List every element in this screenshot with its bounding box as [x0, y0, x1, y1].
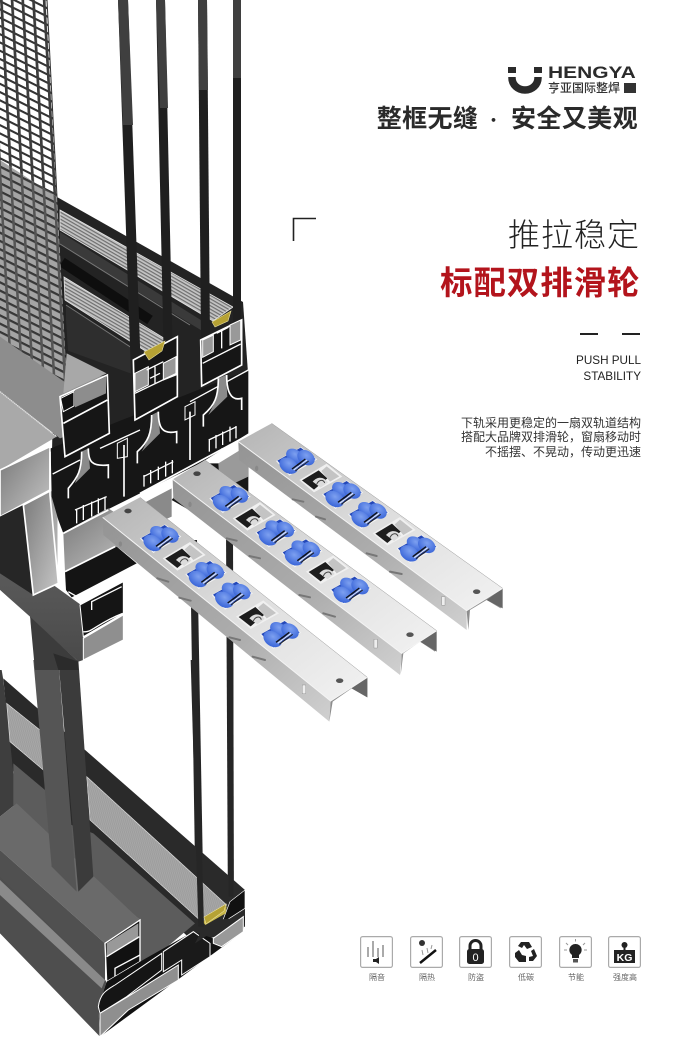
- roller rail 1: [103, 497, 367, 722]
- logo U mark: [508, 67, 542, 90]
- icon: low carbon recycle: [509, 936, 542, 968]
- body text: [461, 414, 641, 460]
- glass pane bars lower: [190, 530, 234, 930]
- roller rail 3: [238, 423, 503, 630]
- heading: 推拉稳定: [508, 210, 640, 256]
- label: energy saving: 节能: [568, 973, 584, 982]
- icon: heat insulation: [410, 936, 443, 968]
- upper frame cross-section: [0, 320, 248, 670]
- upper box profile C: [201, 320, 242, 386]
- mesh screen lower: [0, 160, 67, 386]
- yellow glass spacers: [144, 311, 231, 924]
- label: low carbon: 低碳: [518, 973, 534, 982]
- icon: energy saving bulb: [559, 936, 592, 968]
- english subtitle: [576, 354, 641, 382]
- mullion connectors: [68, 375, 242, 523]
- mesh screen upper: [0, 0, 57, 197]
- body text: 下轨采用更稳定的一扇双轨道结构: [461, 414, 641, 431]
- red heading: 标配双排滑轮: [440, 257, 640, 304]
- english subtitle: STABILITY: [583, 370, 641, 382]
- icon: sound insulation: [360, 936, 393, 968]
- divider dashes: [580, 333, 640, 335]
- upper box profile B: [133, 337, 177, 420]
- body text: 不摇摆、不晃动，传动更迅速: [485, 443, 641, 460]
- label: sound insulation: 隔音: [369, 973, 385, 982]
- lower frame sections: [63, 445, 248, 660]
- icon: anti-theft lock: 0: [472, 952, 479, 964]
- upper frame rails: [52, 197, 248, 453]
- label: anti-theft: 防盗: [468, 973, 484, 982]
- icon: anti-theft lock: [459, 936, 492, 968]
- upper box profile A: [60, 375, 109, 457]
- roller rail 2: [173, 460, 437, 675]
- glass pane bars upper: [64, 0, 241, 395]
- logo wordmark: HENGYA: [548, 64, 636, 82]
- lower frame illustration: [0, 660, 245, 1037]
- label: heat insulation: 隔热: [419, 973, 435, 982]
- top slogan: 整框无缝 · 安全又美观: [377, 99, 638, 135]
- icon: high strength KG: KG: [617, 952, 632, 964]
- english subtitle: PUSH PULL: [576, 354, 641, 367]
- corner bracket mark: [294, 218, 316, 241]
- label: high strength: 强度高: [613, 973, 637, 982]
- body text: 搭配大品牌双排滑轮，窗扇移动时: [461, 428, 641, 445]
- icon: high strength KG: [608, 936, 641, 968]
- logo chinese name: 亨亚国际整焊: [548, 79, 620, 96]
